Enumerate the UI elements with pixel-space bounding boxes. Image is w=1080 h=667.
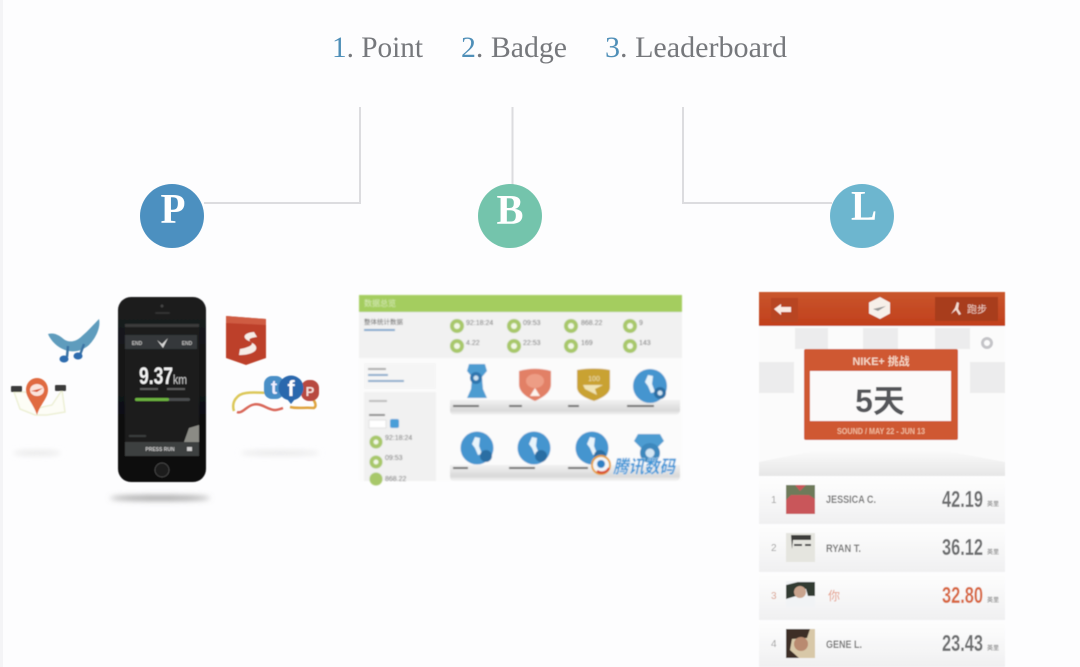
row 2: 2 xyxy=(771,543,777,554)
row 4: GENE L. xyxy=(826,639,862,651)
row 1 xyxy=(759,476,1005,524)
icon: winged music note xyxy=(48,319,99,362)
icon: social route xyxy=(233,376,319,412)
row 2: 英里 xyxy=(987,548,999,556)
icon: red shield badge xyxy=(226,316,266,365)
panel: leaderboard screenshot xyxy=(759,292,1005,667)
circle icon: L: L xyxy=(851,184,877,230)
stats overview: 169 xyxy=(581,340,593,347)
floor shadows xyxy=(13,451,320,500)
stats overview: 92:18:24 xyxy=(466,320,493,327)
green title bar xyxy=(359,295,682,312)
left edge strip xyxy=(0,0,3,667)
row 1: JESSICA C. xyxy=(826,494,876,506)
sidebar xyxy=(364,363,436,486)
icon: social route: t xyxy=(271,378,278,399)
shelf captions xyxy=(453,405,654,407)
circle icon: B xyxy=(478,184,542,248)
badge: blue medal xyxy=(634,434,664,450)
badge: blue trophy xyxy=(467,364,487,398)
circle icon: L xyxy=(830,184,894,248)
panel: badge screenshot xyxy=(359,295,682,486)
distance reading: 9.37 xyxy=(139,363,173,390)
challenge card: SOUND / MAY 22 - JUN 13 xyxy=(837,427,925,436)
icon: smartphone: END xyxy=(132,341,143,347)
checker background xyxy=(759,328,1005,393)
watermark: Tencent Digital xyxy=(592,456,677,477)
stats overview: 整体统计数据 xyxy=(364,317,404,326)
connector: Badge to B circle xyxy=(512,107,514,186)
row 4 xyxy=(759,620,1005,667)
row 1: 英里 xyxy=(987,500,999,508)
icon: social route: f xyxy=(287,376,295,401)
stats overview xyxy=(359,312,682,358)
icon: smartphone: PRESS RUN xyxy=(145,447,175,453)
connector: Point to P circle xyxy=(204,107,360,203)
icon: smartphone: km xyxy=(173,372,187,387)
row 1: 1 xyxy=(771,495,777,506)
icon: smartphone: END xyxy=(182,341,193,347)
heading item: 1. Point: 1. Point xyxy=(332,31,424,64)
row 2 xyxy=(759,524,1005,572)
orange header bar xyxy=(759,292,1005,326)
badge: orange shield xyxy=(519,369,551,401)
row 3 xyxy=(759,572,1005,620)
stats overview: 22:53 xyxy=(523,340,541,347)
progress bar xyxy=(135,398,190,401)
sidebar: 92:18:24 xyxy=(385,435,412,442)
circle icon: P xyxy=(140,184,204,248)
leaderboard rows xyxy=(759,476,1005,667)
panel: point app illustration xyxy=(11,297,320,500)
badge: blue running circle xyxy=(633,369,667,403)
row 4: 英里 xyxy=(987,644,999,652)
connector: Leaderboard to L circle xyxy=(683,107,832,203)
stats overview: 09:53 xyxy=(523,320,541,327)
green title bar: 数据总览 xyxy=(364,298,396,308)
settings icon xyxy=(982,338,992,348)
icon: social route: P xyxy=(306,384,315,399)
stats overview: 9 xyxy=(639,320,643,327)
row 1: 42.19 xyxy=(942,486,983,512)
stats overview: 143 xyxy=(639,340,651,347)
heading item: 2. Badge: 2. Badge xyxy=(461,31,567,64)
title: three elements list xyxy=(332,31,787,64)
badge shelf: top row: 100 xyxy=(588,376,600,383)
icon: map pin xyxy=(11,378,66,415)
badge shelf: bottom row xyxy=(450,432,680,481)
circle icon: P: P xyxy=(160,187,186,233)
icon: smartphone xyxy=(118,297,206,482)
challenge card xyxy=(804,349,958,440)
badge shelf: top row xyxy=(450,364,680,415)
circle icon: B: B xyxy=(496,188,524,234)
badge: gold shield xyxy=(577,368,610,401)
stats overview: 868.22 xyxy=(581,320,603,327)
challenge card: NIKE+ 挑战 xyxy=(852,354,910,368)
sidebar: 868.22 xyxy=(385,476,407,483)
row 4: 23.43 xyxy=(942,630,983,656)
sidebar: 09:53 xyxy=(385,455,403,462)
row 2: 36.12 xyxy=(942,534,983,560)
road xyxy=(759,450,1005,476)
row 3: 你 xyxy=(828,589,840,603)
watermark: Tencent Digital: 腾讯数码 xyxy=(613,457,677,477)
row 3: 32.80 xyxy=(942,582,983,608)
row 4: 4 xyxy=(771,639,777,650)
challenge card: 5天 xyxy=(855,383,905,419)
row 2: RYAN T. xyxy=(826,543,861,555)
orange header bar: 跑步 xyxy=(967,303,987,316)
row 3: 英里 xyxy=(987,596,999,604)
stats overview: 4.22 xyxy=(466,340,480,347)
heading item: 3. Leaderboard: 3. Leaderboard xyxy=(605,31,787,64)
row 3: 3 xyxy=(771,591,777,602)
